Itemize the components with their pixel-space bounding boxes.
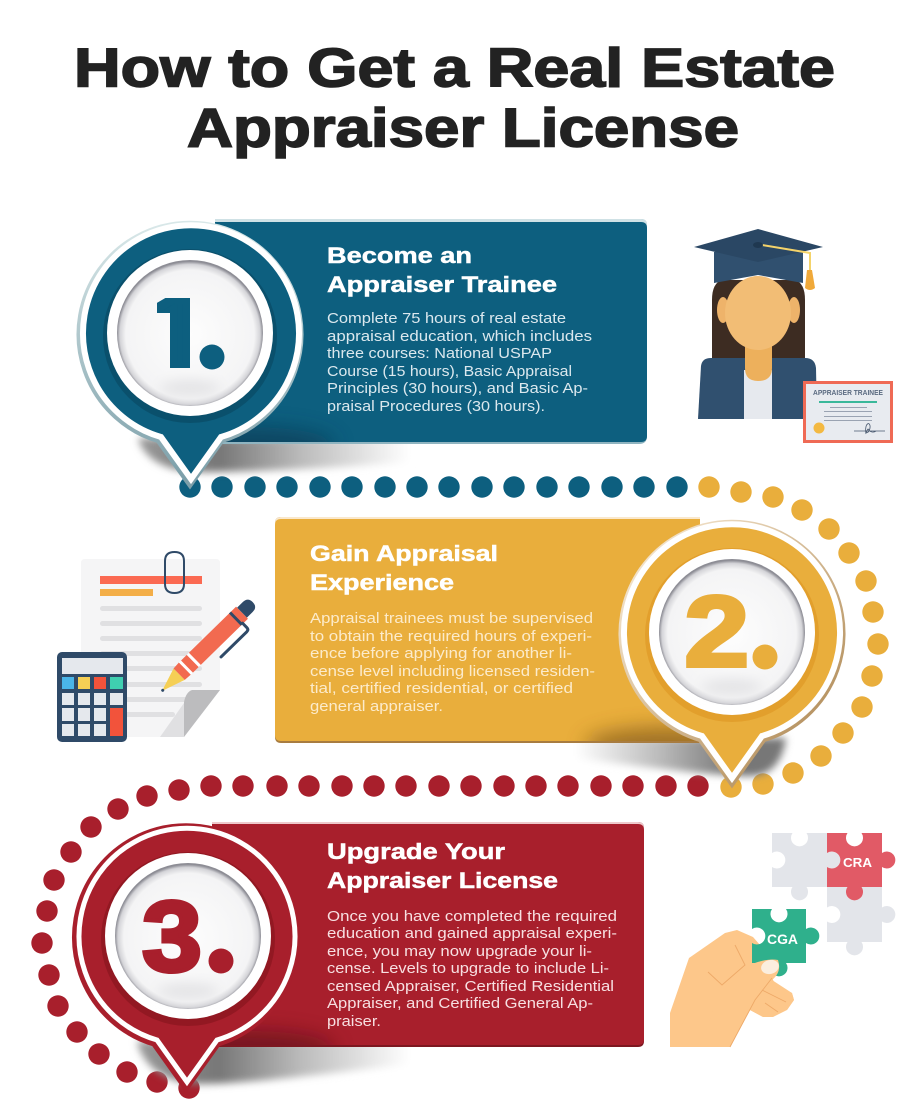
pin 2 with number — [624, 524, 840, 779]
number 3: . — [208, 881, 236, 993]
panel 1 body text — [327, 311, 592, 415]
panel 3 body text: censed Appraiser, Certified Residential — [327, 979, 614, 995]
panel 1 heading: Appraiser Trainee — [327, 272, 557, 297]
panel 3 body text: education and gained appraisal experi- — [327, 926, 617, 942]
certificate — [803, 381, 893, 443]
panel 2: gain appraisal experience — [275, 517, 786, 776]
title — [74, 36, 835, 158]
illustration: graduate with certificate — [694, 229, 893, 443]
dotted path: red segment — [31, 775, 709, 1099]
panel 3 body text: ence, you may now upgrade your li- — [327, 944, 592, 960]
panel 1 body text: Principles (30 hours), and Basic Ap- — [327, 381, 588, 397]
title: Appraiser License — [187, 96, 739, 158]
dotted path: teal segment — [179, 476, 688, 498]
panel 1: become an appraiser trainee — [138, 219, 647, 472]
number 1: 1 — [146, 278, 208, 390]
puzzle piece CRA: CRA — [843, 855, 873, 870]
panel 3 heading — [327, 839, 558, 893]
number 1 — [157, 298, 224, 370]
panel 1 body text: Course (15 hours), Basic Appraisal — [327, 364, 572, 380]
number 1: . — [199, 277, 227, 389]
panel 2 body text — [310, 611, 595, 715]
dotted path: gold segment — [698, 476, 889, 798]
thumb and fingers — [700, 945, 794, 1047]
panel 3 heading: Appraiser License — [327, 868, 558, 893]
number 3: 3 — [142, 881, 202, 993]
panel 3 body text: praiser. — [327, 1014, 381, 1030]
panel 3 body text: cense. Levels to upgrade to include Li- — [327, 961, 609, 977]
panel 2 body text: general appraiser. — [310, 699, 443, 715]
pen — [156, 596, 265, 703]
panel 1 body text: Complete 75 hours of real estate — [327, 311, 566, 327]
puzzle piece grey left — [772, 833, 840, 900]
panel 3 body text: Once you have completed the required — [327, 909, 617, 925]
number 2: . — [752, 577, 780, 689]
number 2: 2 — [684, 576, 749, 688]
paper — [81, 559, 220, 737]
number 2 — [684, 576, 780, 689]
certificate: APPRAISER TRAINEE — [813, 390, 883, 397]
panel 1 heading — [327, 243, 557, 297]
panel 3: upgrade your appraiser license — [137, 822, 644, 1084]
panel 2 heading: Gain Appraisal — [310, 541, 498, 566]
puzzle piece CGA: CGA — [767, 932, 798, 947]
panel 3 body text — [327, 909, 617, 1030]
panel 1 body text: appraisal education, which includes — [327, 329, 592, 345]
puzzle piece grey lower — [827, 887, 895, 955]
panel 3 body text: Appraiser, and Certified General Ap- — [327, 996, 593, 1012]
number 3 — [142, 881, 236, 993]
panel 2 heading: Experience — [310, 570, 454, 595]
illustration: document, pen and calculator — [57, 552, 265, 742]
panel 1 body text: three courses: National USPAP — [327, 346, 552, 362]
panel 2 heading — [310, 541, 498, 595]
panel 2 body text: ence before applying for another li- — [310, 646, 572, 662]
pin 3 with number — [78, 828, 295, 1083]
hand — [670, 930, 794, 1047]
title: How to Get a Real Estate — [74, 36, 835, 98]
panel 2 body text: cense level including licensed residen- — [310, 664, 595, 680]
panel 2 body text: Appraisal trainees must be supervised — [310, 611, 593, 627]
calculator — [57, 652, 127, 742]
puzzle piece CGA — [752, 909, 819, 976]
panel 2 body text: tial, certified residential, or certified — [310, 681, 573, 697]
panel 3 heading: Upgrade Your — [327, 839, 506, 864]
panel 1 heading: Become an — [327, 243, 472, 268]
illustration: hand placing puzzle pieces — [670, 833, 895, 1047]
puzzle piece CRA — [827, 833, 895, 900]
paperclip — [165, 552, 184, 593]
panel 2 body text: to obtain the required hours of experi- — [310, 629, 592, 645]
panel 1 body text: praisal Procedures (30 hours). — [327, 399, 545, 415]
pin 1 with number — [82, 225, 299, 480]
